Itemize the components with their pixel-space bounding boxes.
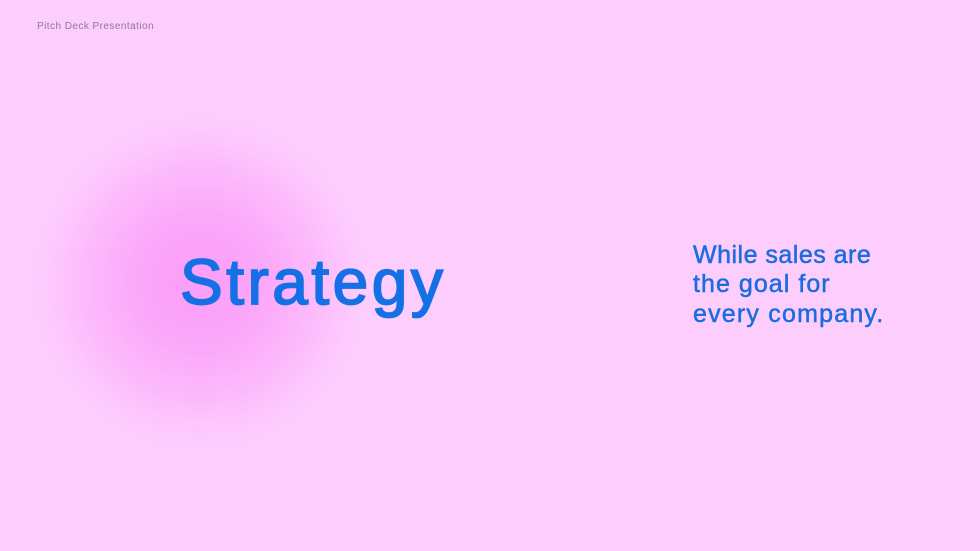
body text: every company.: [693, 300, 884, 328]
header label: Pitch Deck Presentation: [37, 20, 154, 32]
body text: [692, 240, 884, 328]
title: Strategy: [180, 246, 446, 318]
gradient blob: [25, 108, 375, 458]
body text: the goal for: [693, 270, 831, 298]
body text: While sales are: [693, 240, 871, 268]
